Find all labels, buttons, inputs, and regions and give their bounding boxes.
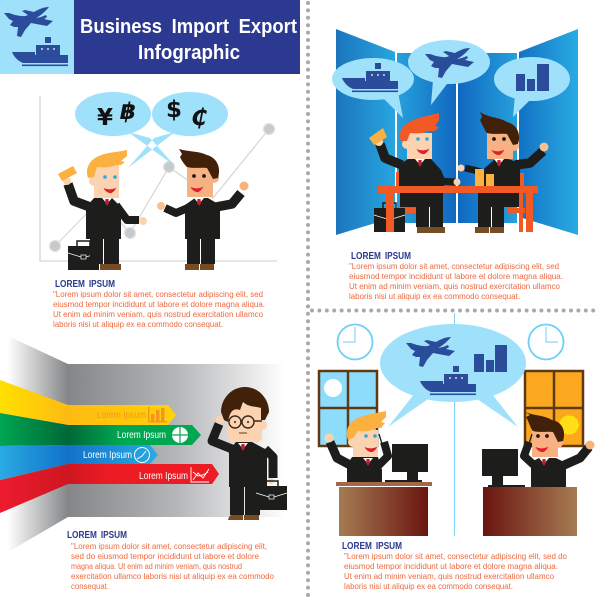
chairs [396,172,525,213]
speech bubble: ship [332,58,414,118]
speech bubbles with currency: ฿ [120,99,136,125]
text: meeting [349,251,563,301]
drink cups [475,169,494,186]
text: phone call: Ut enim ad minim veniam, quis nostrud exercitation ullamco [344,571,554,581]
brown-haired caller [524,412,594,487]
text: currency talk: laboris nisi ut aliquip ex ea commodo consequat. [53,319,223,329]
text: options: LOREM IPSUM [67,530,127,541]
text: meeting: laboris nisi ut aliquip ex ea commodo consequat. [349,291,520,301]
arrow: red [0,464,219,513]
title [80,15,297,64]
title banner [74,0,300,74]
arrow: green [0,413,201,446]
text: currency talk: Ut enim ad minim veniam, quis nostrud exercitation ullamco [53,309,263,319]
speech bubble: chart [494,57,570,117]
panel: currency talk [40,92,277,329]
centre divider [454,313,456,536]
text: options [67,530,274,591]
left monitor and keyboard [385,444,428,482]
briefcase [256,481,287,510]
window: right [525,371,583,446]
speech bubble: trade [380,324,526,427]
arrow: red: Lorem Ipsum [139,471,188,482]
left desk [336,482,432,536]
right monitor and keyboard [482,449,525,487]
speech bubbles with currency: ¥ [97,105,113,131]
speech bubble: plane [408,40,490,105]
text: phone call: "Lorem ipsum dolor sit amet, consectetur adipiscing elit, sed do [344,551,567,561]
brown-haired businessman seated [458,112,548,233]
icon: bars [148,407,167,422]
arrow: green: Lorem Ipsum [117,430,166,441]
blond businessman [58,150,147,270]
text: meeting: "Lorem ipsum dolor sit amet, consectetur adipiscing elit, sed [349,261,559,271]
icon: plane [4,7,53,37]
text: options: magna aliqua. Ut enim ad minim veniam, quis nostrud [71,561,242,571]
header icon panel [0,0,74,74]
text: meeting: LOREM IPSUM [351,251,411,262]
right desk [483,487,577,536]
icon: line chart [191,467,209,482]
text: phone call [342,541,567,591]
speech bubbles with currency: $ [166,97,182,123]
window: left [319,371,377,446]
arrow: blue [0,445,158,480]
panel: phone call across time zones [319,313,594,591]
panel: options arrows [0,336,287,591]
text: options: sed do eiusmod tempor incididunt ut labore et dolore [71,551,259,561]
title: Infographic [138,41,240,64]
arrow: yellow: Lorem Ipsum [97,410,146,421]
text: options: consequat. [71,581,109,591]
text: options: exercitation ullamco laboris nisi ut aliquip ex ea commodo [71,571,274,581]
businessman thinking [212,387,287,520]
title: Business Import Export [80,15,297,38]
text: currency talk: LOREM IPSUM [55,279,115,290]
brown-haired businessman [157,149,248,270]
icon: ship [12,37,68,66]
text: meeting: eiusmod tempor incididunt ut labore et dolore magna aliqua. [349,271,563,281]
text: phone call: laboris nisi ut aliquip ex ea commodo consequat. [344,581,513,591]
text: currency talk: eiusmod tempor incididunt ut labore et dolore magna aliqua. [53,299,265,309]
text: meeting: Ut enim ad minim veniam, quis nostrud exercitation ullamco [349,281,560,291]
text: options: "Lorem ipsum dolor sit amet, consectetur adipiscing elit, [71,541,267,551]
icon: clock [134,448,150,462]
line chart backdrop [40,96,277,261]
grey perspective wall [8,336,285,552]
dotted dividers [308,3,600,600]
briefcase [374,203,405,232]
arrow: yellow [0,380,176,425]
speech bubbles with currency [75,92,228,168]
speech bubbles with currency: ₵ [191,105,207,131]
folding screen [336,29,578,235]
clock: right [528,324,564,360]
red-haired businessman [369,113,460,233]
clock: left [338,324,372,360]
text: currency talk: "Lorem ipsum dolor sit amet, consectetur adipiscing elit, sed [53,289,263,299]
table [378,186,538,232]
icon: pie [172,427,188,443]
text: currency talk [53,279,265,329]
text: phone call: eiusmod tempor incididunt ut labore et dolore magna aliqua. [344,561,558,571]
arrow: blue: Lorem Ipsum [83,450,132,461]
panel: meeting at table [332,29,578,301]
blond caller [324,411,388,484]
briefcase [68,241,99,270]
text: phone call: LOREM IPSUM [342,541,402,552]
